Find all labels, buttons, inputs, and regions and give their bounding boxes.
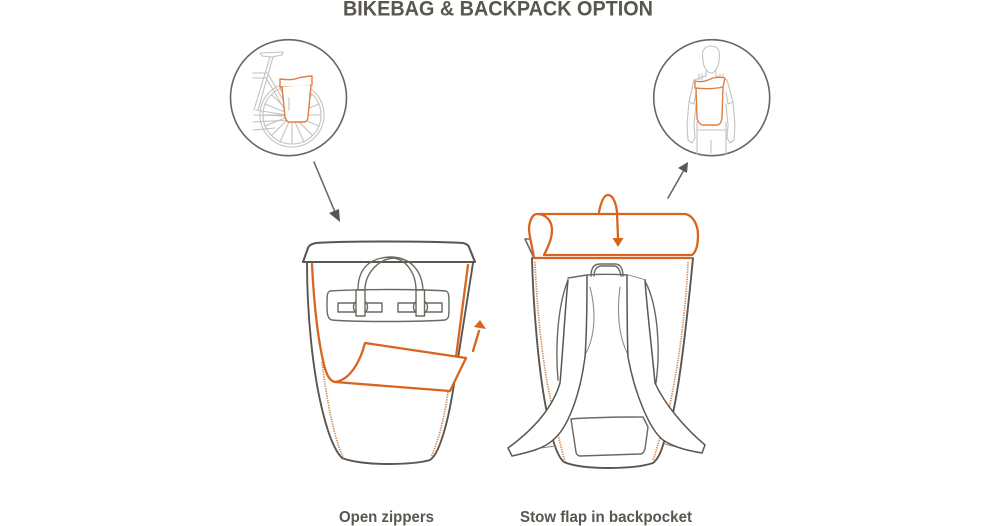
orange zipper lines bbox=[312, 264, 468, 382]
caption: stow flap: Stow flap in backpocket bbox=[520, 509, 693, 526]
dotted stitching bbox=[535, 262, 688, 462]
orange flap bbox=[335, 343, 466, 391]
arrow: from backpack to person bbox=[668, 162, 688, 198]
icon: person with backpack in circle bbox=[654, 40, 770, 156]
rolled flap bbox=[529, 214, 698, 258]
bag body bbox=[307, 263, 473, 464]
icon: bicycle frame and wheel bbox=[253, 52, 324, 147]
icon: orange bag on bike bbox=[280, 76, 312, 122]
carrying handle and mounting plate bbox=[327, 257, 449, 322]
icon: person outline bbox=[687, 46, 735, 154]
backpack: stow flap bbox=[508, 195, 705, 468]
orange arrow bbox=[599, 195, 624, 247]
bike bag: open zippers bbox=[303, 242, 486, 464]
grey tab bbox=[525, 239, 533, 256]
arrow: from bike to bag bbox=[314, 162, 340, 222]
back panel bbox=[557, 274, 658, 383]
icon: bike with bag in circle bbox=[230, 40, 346, 156]
right shoulder strap bbox=[627, 275, 705, 453]
caption: open zippers: Open zippers bbox=[339, 509, 434, 526]
top handle bbox=[591, 264, 623, 276]
zippers dotted stitching bbox=[322, 362, 448, 457]
icon: orange backpack on person bbox=[695, 77, 725, 125]
small lines behind straps bbox=[533, 444, 688, 450]
bag body bbox=[532, 258, 693, 468]
orange arrow bbox=[473, 320, 486, 351]
back pocket bbox=[571, 417, 648, 456]
left shoulder strap bbox=[508, 276, 587, 456]
bag lid bbox=[303, 242, 475, 262]
